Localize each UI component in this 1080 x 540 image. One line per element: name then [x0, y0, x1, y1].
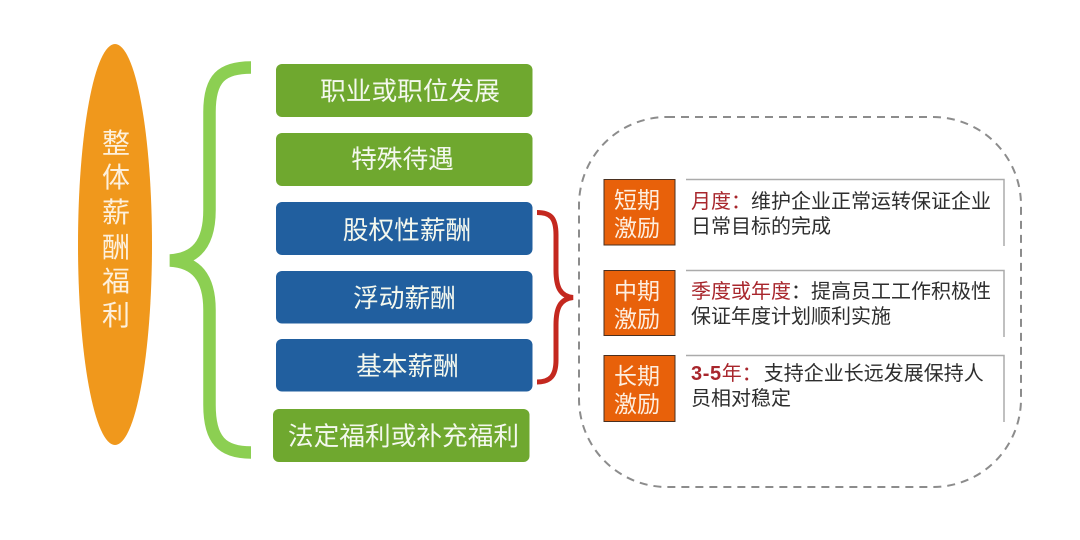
- oval: overall compensation: [78, 44, 152, 445]
- text: short term: 日常目标的完成: [691, 215, 831, 238]
- oval: overall compensation: 福: [102, 266, 130, 297]
- oval: overall compensation: 薪: [102, 197, 130, 228]
- box: statutory benefits: [273, 409, 530, 462]
- green brace: [170, 68, 251, 452]
- badge: long term: [604, 356, 675, 422]
- frame: short term: [686, 180, 1004, 246]
- badge: short term: [604, 180, 675, 245]
- frame: medium term: [686, 270, 1004, 337]
- box: base pay: [276, 339, 532, 392]
- box: equity pay: [276, 202, 532, 255]
- frame: long term: [686, 356, 1004, 422]
- oval: overall compensation: 利: [102, 300, 130, 331]
- text: medium term: 季度或年度：提高员工工作积极性: [691, 281, 991, 303]
- badge: medium term: [604, 270, 675, 336]
- badge: long term: 激励: [614, 391, 660, 417]
- box: career development: [276, 64, 532, 117]
- oval: overall compensation: 整: [102, 128, 130, 159]
- oval: overall compensation: 酬: [102, 232, 130, 263]
- badge: short term: 激励: [614, 215, 660, 241]
- badge: long term: 长期: [614, 363, 660, 389]
- dashed panel: incentives: [579, 117, 1021, 487]
- box: career development: 职业或职位发展: [320, 77, 500, 106]
- box: special treatment: 特殊待遇: [351, 145, 454, 174]
- box: equity pay: 股权性薪酬: [343, 216, 471, 245]
- text: long term: 员相对稳定: [691, 387, 791, 410]
- text: short term: 月度：维护企业正常运转保证企业: [691, 191, 991, 213]
- text: long term: 3-5年：支持企业长远发展保持人: [691, 363, 984, 385]
- badge: medium term: 中期: [614, 278, 660, 304]
- badge: medium term: 激励: [614, 306, 660, 332]
- box: base pay: 基本薪酬: [356, 352, 459, 381]
- red brace: [537, 212, 573, 382]
- box: variable pay: 浮动薪酬: [353, 284, 456, 313]
- text: medium term: 保证年度计划顺利实施: [691, 305, 891, 328]
- box: special treatment: [276, 133, 532, 186]
- oval: overall compensation: 体: [102, 162, 130, 193]
- box: statutory benefits: 法定福利或补充福利: [288, 422, 519, 451]
- badge: short term: 短期: [614, 187, 660, 213]
- box: variable pay: [276, 271, 532, 324]
